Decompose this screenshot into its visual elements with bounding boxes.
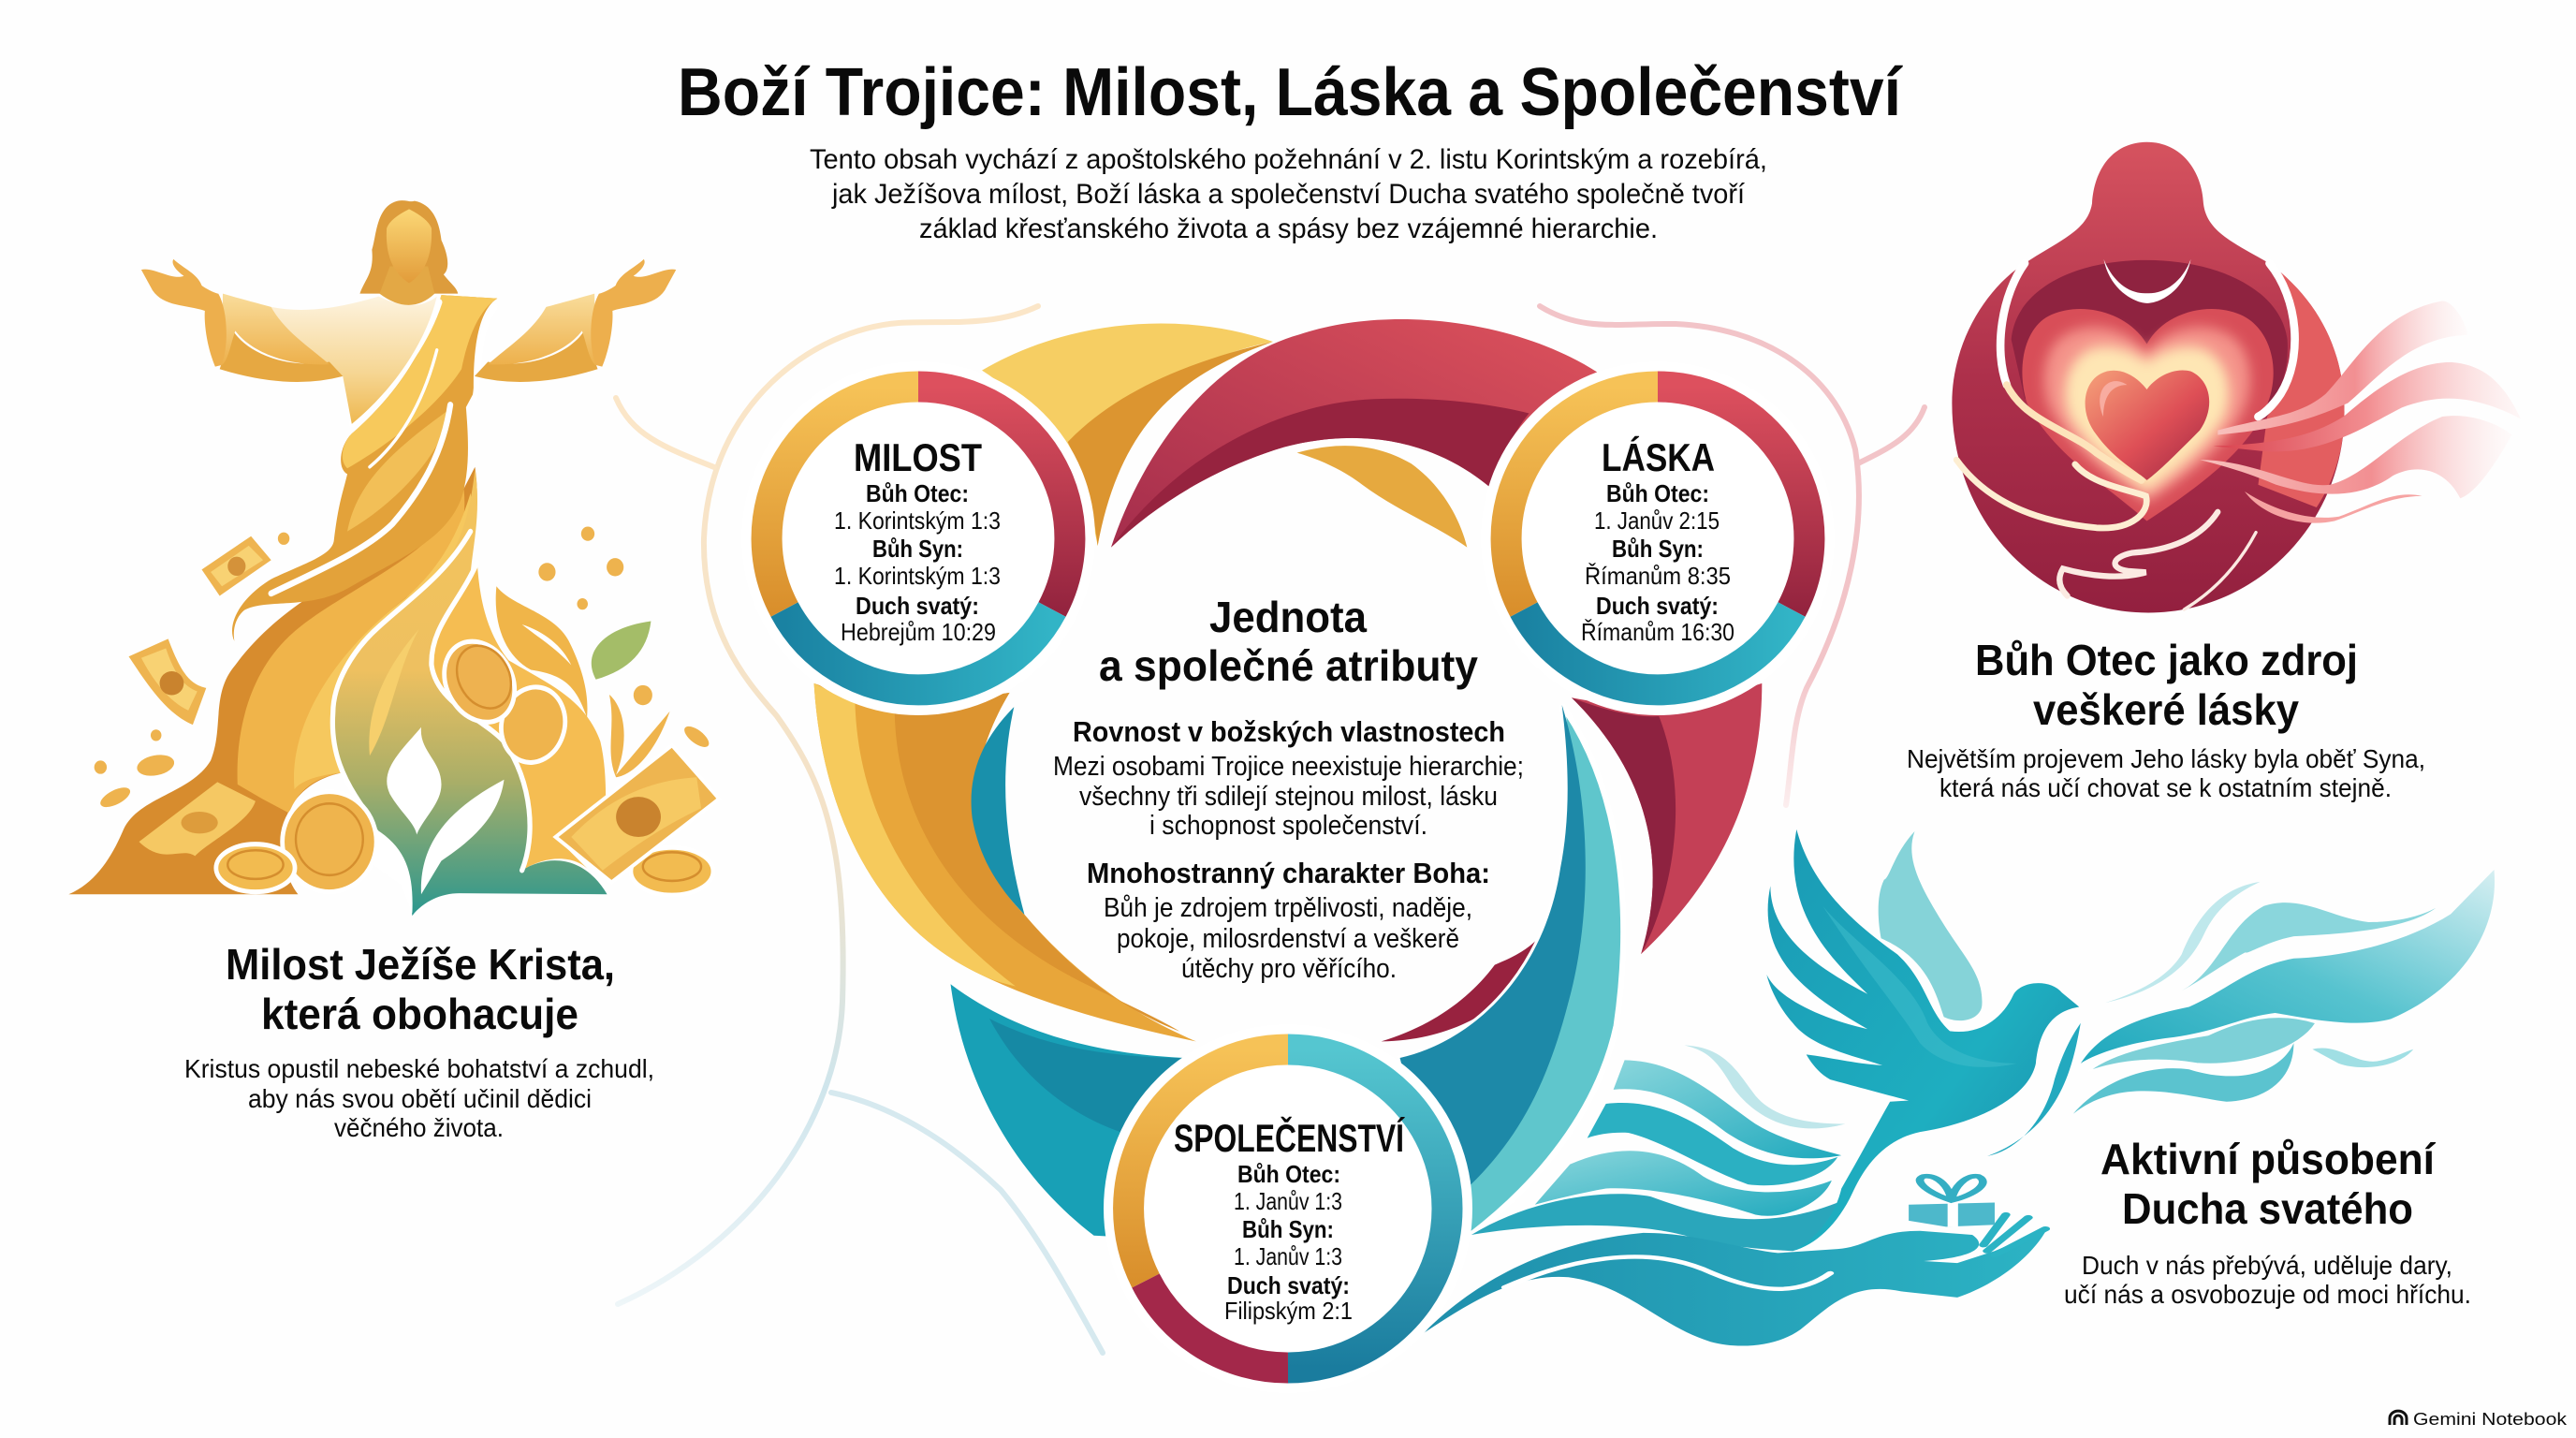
text: Milost verses: 1. Korintským 1:3	[834, 562, 1001, 590]
ribbon: red small crescent	[1382, 938, 1538, 1041]
text: Láska verses: Duch svatý:	[1596, 592, 1719, 620]
wing highlight	[1822, 906, 2017, 1067]
ribbon: red top shade	[1111, 399, 1530, 548]
center text: unity and shared attributes: Rovnost v božských vlastnostech	[1073, 715, 1505, 748]
ribbon: gold inner piece	[1297, 446, 1467, 548]
right flames	[2073, 870, 2495, 1114]
coins	[216, 627, 713, 895]
center text: unity and shared attributes: a společné atributy	[1099, 641, 1478, 690]
text: grace of Christ	[184, 940, 654, 1142]
connector lines	[616, 306, 1925, 1353]
ribbon: teal right shade	[1400, 705, 1586, 1184]
center text: unity and shared attributes: Jednota	[1209, 593, 1367, 641]
dove body and near wing	[1766, 829, 2079, 1251]
illustration: Christ with flowing robe and riches	[68, 200, 719, 916]
heart glow layers	[2022, 309, 2274, 521]
upper robe and drape	[232, 295, 497, 641]
ribbon: teal bottom left	[951, 984, 1187, 1237]
text: Father as source of love: Největším projevem Jeho lásky byla oběť Syna,	[1907, 744, 2425, 773]
left arm	[141, 259, 343, 382]
intro text	[810, 144, 1767, 244]
tail waves light	[1685, 1045, 1845, 1128]
text: Láska verses: Římanům 8:35	[1585, 562, 1731, 590]
text: Father as source of love: veškeré lásky	[2033, 685, 2299, 734]
drape shade	[347, 407, 452, 532]
ribbon: teal right	[1400, 705, 1623, 1235]
coin rims	[227, 635, 701, 881]
ribbon: gold left dark stripe	[895, 693, 1179, 1032]
ribbon: gold left	[814, 683, 1196, 1041]
hair	[359, 200, 458, 294]
text: active work of the Spirit: Aktivní působení	[2100, 1135, 2437, 1183]
text: grace of Christ: věčného života.	[334, 1113, 504, 1142]
text: Milost verses: Bůh Syn:	[872, 535, 963, 563]
ribbon: gold top shade	[1068, 342, 1273, 546]
tail wave 3	[1535, 1151, 1832, 1216]
ring: Láska	[1481, 361, 1835, 715]
chest dark	[2012, 260, 2288, 417]
ring: Společenství	[1104, 1024, 1472, 1393]
text: Společenství verses: Duch svatý:	[1227, 1271, 1350, 1299]
center text: unity and shared attributes: i schopnost společenství.	[1149, 811, 1427, 841]
right shoulder light	[2258, 263, 2345, 507]
text: Milost verses	[834, 435, 1001, 646]
central heart	[2086, 370, 2209, 480]
center text: unity and shared attributes: Mnohostranný charakter Boha:	[1087, 857, 1490, 889]
text: Father as source of love: která nás učí chovat se k ostatním stejně.	[1939, 773, 2392, 802]
light far wing	[1879, 831, 1982, 1020]
text: Father as source of love: Bůh Otec jako zdroj	[1975, 636, 2358, 684]
text: Společenství verses: 1. Janův 1:3	[1234, 1242, 1342, 1270]
center text: unity and shared attributes: pokoje, milosrdenství a veškerě	[1117, 924, 1459, 954]
ribbon: teal bottom left shade	[989, 1019, 1187, 1133]
ribbon: red top	[1111, 319, 1598, 548]
flow streak	[369, 629, 419, 756]
intro text: Tento obsah vychází z apoštolského požehnání v 2. listu Korintským a rozebírá,	[810, 144, 1767, 175]
center text: unity and shared attributes: všechny tři sdilejí stejnou milost, lásku	[1079, 782, 1498, 812]
text: Láska verses: LÁSKA	[1602, 435, 1715, 479]
text: Láska verses: Římanům 16:30	[1581, 618, 1734, 646]
neck	[379, 267, 434, 305]
robe green flow	[332, 469, 607, 916]
neck crescent	[2103, 259, 2191, 303]
watermark: Gemini Notebook	[2413, 1410, 2568, 1429]
robe stripe mid	[238, 474, 464, 813]
love streams	[2200, 301, 2521, 523]
text: Společenství verses	[1174, 1115, 1405, 1325]
text: Father as source of love	[1907, 636, 2425, 802]
leaves	[496, 586, 670, 777]
fingers	[1983, 1214, 2045, 1255]
drape white slits	[271, 302, 495, 594]
sash light	[343, 295, 497, 468]
center text: unity and shared attributes: Mezi osobami Trojice neexistuje hierarchie;	[1053, 752, 1524, 782]
ribbon: red right shade	[1572, 697, 1676, 954]
tail slit	[1505, 1256, 1830, 1289]
illustration: Spirit dove	[1423, 829, 2495, 1346]
text: Společenství verses: Bůh Otec:	[1237, 1160, 1340, 1188]
text: Láska verses: Bůh Otec:	[1606, 479, 1709, 507]
right arm	[475, 259, 676, 382]
text: Milost verses: Hebrejům 10:29	[841, 618, 996, 646]
title: Boží Trojice: Milost, Láska a Společenství	[678, 55, 1903, 130]
body silhouette	[1952, 142, 2345, 612]
text: active work of the Spirit: Ducha svatého	[2122, 1184, 2413, 1233]
text: Společenství verses: 1. Janův 1:3	[1234, 1187, 1342, 1215]
ribbon: gold top	[982, 323, 1273, 546]
ribbon: gold left light stripe	[814, 683, 1016, 987]
under wing sliver	[1987, 1023, 2081, 1156]
robe lower left	[68, 467, 477, 894]
center text: unity and shared attributes: útěchy pro věřícího.	[1181, 954, 1397, 984]
long tail and hand	[1423, 1229, 2047, 1346]
text: grace of Christ: aby nás svou obětí učinil dědici	[248, 1084, 592, 1113]
robe right gold	[432, 563, 606, 871]
text: Milost verses: Duch svatý:	[856, 592, 979, 620]
text: Milost verses: 1. Korintským 1:3	[834, 506, 1001, 535]
heart highlight	[2100, 381, 2127, 417]
arm outlines	[1956, 263, 2295, 609]
center text: unity and shared attributes: Bůh je zdrojem trpělivosti, naděje,	[1104, 893, 1472, 923]
small coins and dots	[95, 526, 712, 811]
banknotes	[129, 536, 719, 882]
gift box	[1909, 1176, 1995, 1226]
flow white edges	[332, 532, 530, 871]
text: Společenství verses: Filipským 2:1	[1224, 1297, 1353, 1325]
center text: unity and shared attributes	[1053, 593, 1524, 984]
text: grace of Christ: Milost Ježíše Krista,	[226, 940, 615, 989]
white sprout	[334, 727, 504, 914]
robe stripe light	[294, 493, 472, 789]
tail wave 4	[1471, 1194, 1837, 1251]
torso	[271, 297, 437, 424]
ribbon: red right	[1572, 683, 1762, 954]
text: Láska verses: Bůh Syn:	[1612, 535, 1704, 563]
text: grace of Christ: Kristus opustil nebeské bohatství a zchudl,	[184, 1054, 654, 1083]
text: Společenství verses: Bůh Syn:	[1242, 1215, 1334, 1243]
face	[387, 209, 432, 283]
ribbon: teal small inner	[972, 707, 1024, 915]
intro text: jak Ježíšova mílost, Boží láska a společenství Ducha svatého společně tvoří	[831, 179, 1746, 210]
text: Milost verses: Bůh Otec:	[866, 479, 969, 507]
text: active work of the Spirit: učí nás a osvobozuje od moci hříchu.	[2064, 1280, 2471, 1309]
text: active work of the Spirit	[2064, 1135, 2471, 1309]
ring: Milost	[741, 361, 1095, 715]
text: grace of Christ: která obohacuje	[261, 990, 578, 1038]
text: Společenství verses: SPOLEČENSTVÍ	[1174, 1115, 1405, 1160]
illustration: Father embracing heart	[1952, 142, 2521, 612]
text: Láska verses: 1. Janův 2:15	[1594, 506, 1720, 535]
tail wave 2	[1588, 1103, 1837, 1185]
text: Láska verses	[1581, 435, 1734, 646]
text: Milost verses: MILOST	[854, 435, 982, 479]
trinity ribbons	[814, 319, 1762, 1237]
intro text: základ křesťanského života a spásy bez vzájemné hierarchie.	[919, 213, 1658, 244]
text: active work of the Spirit: Duch v nás přebývá, uděluje dary,	[2082, 1251, 2452, 1280]
